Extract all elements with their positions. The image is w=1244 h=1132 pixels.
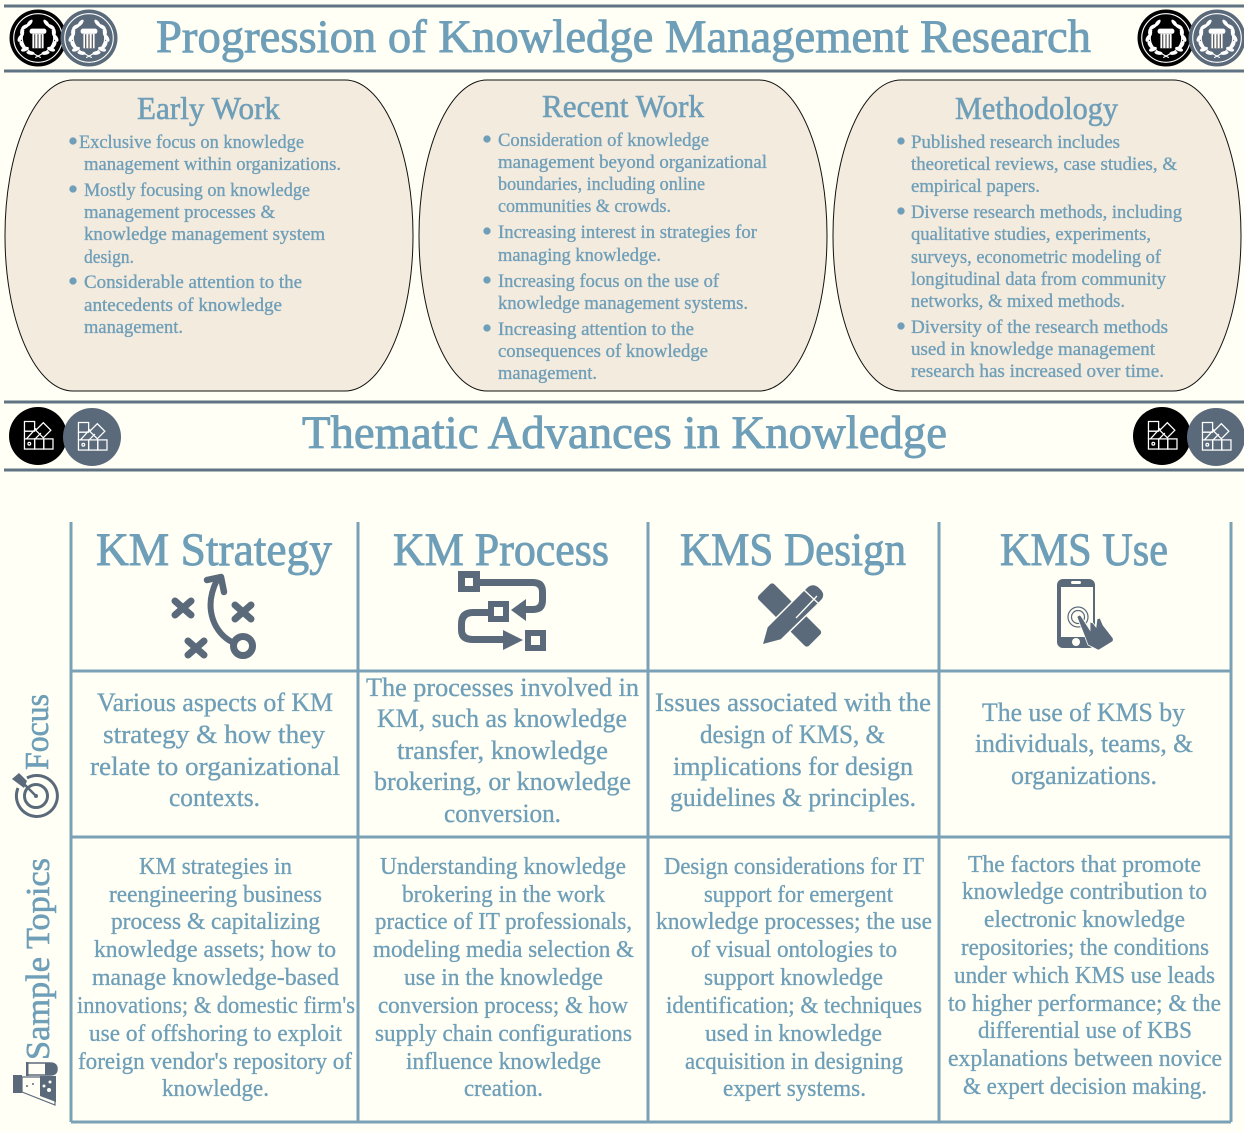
- heading: methodology: Methodology: [955, 90, 1118, 126]
- sample topics: KM Strategy: manage knowledge-based: [92, 965, 339, 991]
- bullet list: recent work: Increasing interest in strategies for: [498, 223, 757, 243]
- icon: pencil and ruler: [757, 582, 824, 648]
- sample topics: KMS Use: knowledge contribution to: [962, 879, 1207, 905]
- sample topics: KMS Use: The factors that promote: [968, 852, 1201, 878]
- focus row: KM Strategy: contexts.: [169, 782, 260, 812]
- row label: Focus: [12, 694, 57, 816]
- bullet list: recent work: managing knowledge.: [498, 246, 661, 266]
- icon: process flow: [458, 571, 546, 651]
- sample topics: KMS Design: [656, 854, 932, 1102]
- sample topics: KM Strategy: process & capitalizing: [111, 909, 320, 935]
- sample topics: KMS Design: support knowledge: [704, 965, 883, 991]
- bullet list: methodology: networks, & mixed methods.: [911, 292, 1125, 312]
- bullet list: early work: Considerable attention to the: [84, 273, 302, 293]
- sample topics: KM Process: Understanding knowledge: [380, 854, 626, 880]
- bullet list: recent work: Consideration of knowledge: [498, 131, 709, 151]
- icon: touch phone: [1057, 579, 1113, 650]
- panel: recent work: [419, 80, 827, 391]
- bullet list: methodology: surveys, econometric modeling of: [911, 248, 1162, 268]
- sample topics: KM Strategy: [77, 854, 355, 1102]
- sample topics: KM Process: modeling media selection &: [373, 937, 634, 963]
- sample topics: KM Strategy: reengineering business: [109, 882, 322, 908]
- section title: Thematic Advances in Knowledge: [302, 407, 947, 459]
- bullet list: methodology: longitudinal data from community: [911, 270, 1167, 290]
- row label: Sample Topics: [13, 858, 57, 1105]
- bullet list: recent work: consequences of knowledge: [498, 342, 708, 362]
- icon: swatch badges right: [1133, 407, 1244, 466]
- focus row: KM Process: transfer, knowledge: [397, 735, 608, 765]
- sample topics: KM Process: influence knowledge: [406, 1049, 601, 1075]
- sample topics: KM Process: creation.: [464, 1076, 543, 1102]
- focus row: KM Strategy: Various aspects of KM: [97, 687, 333, 717]
- focus row: KMS Use: organizations.: [1011, 760, 1157, 790]
- icon: laurel column badges left: [10, 10, 118, 66]
- bullet list: methodology: empirical papers.: [911, 177, 1040, 197]
- bullet list: early work: knowledge management system: [84, 225, 326, 245]
- bullet list: recent work: management.: [498, 364, 597, 384]
- column heading: KM Strategy: KM Strategy: [96, 524, 332, 576]
- focus row: KMS Design: Issues associated with the: [655, 687, 931, 717]
- sample topics: KM Strategy: use of offshoring to exploit: [89, 1021, 342, 1047]
- sample topics: KMS Use: repositories; the conditions: [961, 935, 1209, 961]
- sample topics: KM Process: conversion process; & how: [378, 993, 629, 1019]
- top header band: [4, 6, 1244, 71]
- sample topics: KMS Design: knowledge processes; the use: [656, 909, 932, 935]
- bullet list: early work: [70, 133, 341, 338]
- bullet list: methodology: research has increased over time.: [911, 362, 1164, 382]
- sample topics: KMS Design: used in knowledge: [705, 1021, 882, 1047]
- bullet list: recent work: Increasing focus on the use of: [498, 272, 720, 292]
- row label: Sample Topics: Sample Topics: [20, 858, 57, 1060]
- bullet list: recent work: Increasing attention to the: [498, 320, 694, 340]
- focus row: KM Strategy: relate to organizational: [90, 751, 340, 781]
- sample topics: KM Process: brokering in the work: [402, 882, 605, 908]
- sample topics: KMS Use: to higher performance; & the: [948, 991, 1221, 1017]
- bullet list: methodology: Published research includes: [911, 133, 1120, 153]
- icon: swatch badges left: [9, 407, 121, 466]
- sample topics: KMS Use: explanations between novice: [948, 1046, 1222, 1072]
- bullet list: early work: design.: [84, 248, 134, 268]
- bullet list: recent work: knowledge management systems.: [498, 294, 748, 314]
- bullet list: methodology: used in knowledge management: [911, 340, 1156, 360]
- bullet list: methodology: Diversity of the research methods: [911, 318, 1168, 338]
- title: Progression of Knowledge Management Research: [156, 11, 1091, 63]
- focus row: KM Process: conversion.: [444, 798, 561, 828]
- focus row: KMS Design: [655, 687, 931, 812]
- focus row: KMS Use: individuals, teams, &: [975, 728, 1193, 758]
- table grid: [71, 522, 1231, 1122]
- bullet list: recent work: boundaries, including online: [498, 175, 705, 195]
- bullet list: early work: Mostly focusing on knowledge: [84, 181, 310, 201]
- sample topics: KMS Design: acquisition in designing: [685, 1049, 903, 1075]
- sample topics: KMS Use: electronic knowledge: [984, 907, 1185, 933]
- sample topics: KM Process: use in the knowledge: [404, 965, 603, 991]
- sample topics: KMS Use: [948, 852, 1222, 1100]
- sample topics: KMS Design: expert systems.: [723, 1076, 866, 1102]
- bullet list: methodology: Diverse research methods, including: [911, 203, 1182, 223]
- icon: flask: [13, 1062, 57, 1105]
- focus row: KM Strategy: strategy & how they: [103, 719, 326, 749]
- sample topics: KMS Design: support for emergent: [704, 882, 893, 908]
- sample topics: KM Process: practice of IT professionals,: [375, 909, 632, 935]
- bullet list: recent work: management beyond organizational: [498, 153, 767, 173]
- focus row: KMS Use: The use of KMS by: [982, 697, 1186, 727]
- second header band: [4, 402, 1244, 470]
- sample topics: KM Strategy: KM strategies in: [139, 854, 292, 880]
- bullet list: early work: antecedents of knowledge: [84, 296, 282, 316]
- focus row: KM Strategy: [90, 687, 340, 812]
- sample topics: KMS Use: differential use of KBS: [978, 1018, 1192, 1044]
- focus row: KM Process: KM, such as knowledge: [377, 703, 627, 733]
- icon: laurel column badges right: [1138, 10, 1244, 66]
- bullet list: methodology: theoretical reviews, case studies, &: [911, 155, 1178, 175]
- heading: early work: Early Work: [137, 90, 280, 126]
- sample topics: KMS Design: Design considerations for IT: [664, 854, 924, 880]
- icon: strategy play: [175, 577, 252, 656]
- sample topics: KM Strategy: knowledge assets; how to: [94, 937, 336, 963]
- focus row: KMS Design: guidelines & principles.: [670, 782, 916, 812]
- column heading: KM Process: KM Process: [393, 524, 609, 576]
- sample topics: KMS Use: & expert decision making.: [963, 1074, 1207, 1100]
- focus row: KMS Design: design of KMS, &: [700, 719, 885, 749]
- focus row: KMS Use: [975, 697, 1193, 790]
- focus row: KM Process: [366, 672, 639, 828]
- icon: target: [12, 773, 57, 816]
- sample topics: KMS Design: of visual ontologies to: [691, 937, 897, 963]
- row label: Focus: Focus: [19, 694, 56, 770]
- bullet list: methodology: qualitative studies, experiments,: [911, 225, 1151, 245]
- focus row: KM Process: The processes involved in: [366, 672, 639, 702]
- sample topics: KM Process: supply chain configurations: [375, 1021, 632, 1047]
- sample topics: KM Strategy: innovations; & domestic firm's: [77, 993, 355, 1019]
- bullet list: early work: management processes &: [84, 203, 276, 223]
- sample topics: KM Strategy: foreign vendor's repository of: [78, 1049, 352, 1075]
- focus row: KMS Design: implications for design: [673, 751, 913, 781]
- bullet list: methodology: [898, 133, 1182, 382]
- bullet list: early work: management.: [84, 318, 183, 338]
- panel: early work: [5, 80, 413, 391]
- focus row: KM Process: brokering, or knowledge: [374, 766, 631, 796]
- sample topics: KM Process: [373, 854, 634, 1102]
- sample topics: KM Strategy: knowledge.: [162, 1076, 269, 1102]
- bullet list: recent work: [484, 131, 767, 384]
- heading: recent work: Recent Work: [542, 88, 704, 124]
- bullet list: recent work: communities & crowds.: [498, 197, 671, 217]
- sample topics: KMS Design: identification; & techniques: [666, 993, 922, 1019]
- panel: methodology: [833, 80, 1241, 391]
- bullet list: early work: management within organizations.: [84, 155, 341, 175]
- sample topics: KMS Use: under which KMS use leads: [954, 963, 1215, 989]
- bullet list: early work: Exclusive focus on knowledge: [79, 133, 304, 153]
- column heading: KMS Design: KMS Design: [680, 524, 906, 576]
- column heading: KMS Use: KMS Use: [1000, 524, 1168, 576]
